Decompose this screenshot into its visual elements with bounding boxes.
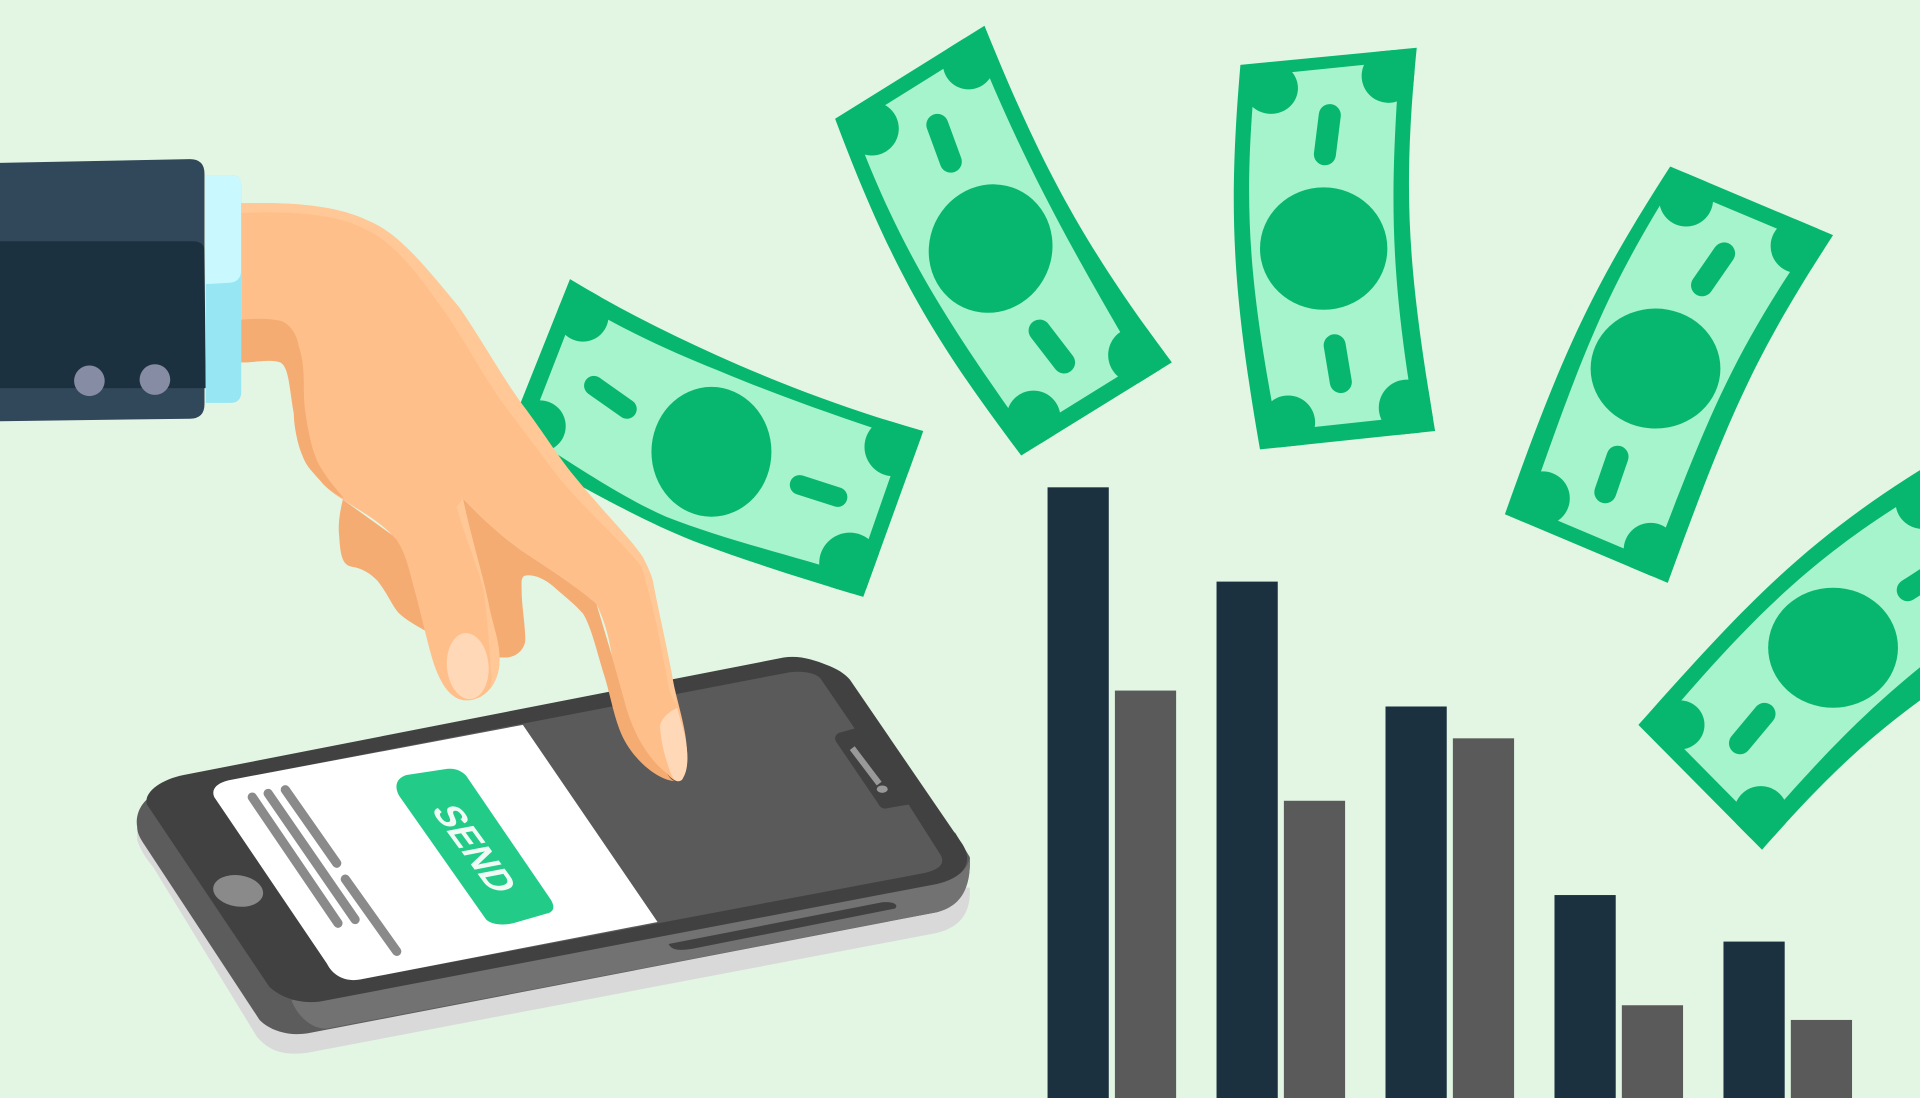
banknote 4	[1505, 167, 1833, 583]
hand top highlight	[241, 203, 653, 580]
bar chart	[1048, 487, 1852, 1098]
banknote 3	[1234, 48, 1435, 449]
speaker	[852, 748, 888, 793]
index fingernail	[660, 708, 687, 781]
index finger edge highlight	[634, 551, 677, 708]
send button	[396, 769, 553, 924]
hand body	[241, 203, 687, 781]
wrist shadow	[241, 319, 344, 498]
hand	[241, 203, 687, 781]
home button	[211, 872, 265, 910]
side slot	[669, 902, 896, 950]
suit sleeve	[0, 159, 206, 421]
smartphone	[137, 657, 970, 1054]
middle fingernail	[444, 631, 491, 701]
banknote 2	[835, 26, 1172, 455]
banknote 1	[504, 279, 923, 597]
text lines	[252, 790, 397, 951]
shirt cuff	[206, 175, 241, 403]
send button: SEND	[421, 802, 526, 896]
middle finger highlight	[457, 498, 500, 689]
banknote 5	[1638, 470, 1920, 850]
screen: white send panel	[213, 725, 658, 980]
